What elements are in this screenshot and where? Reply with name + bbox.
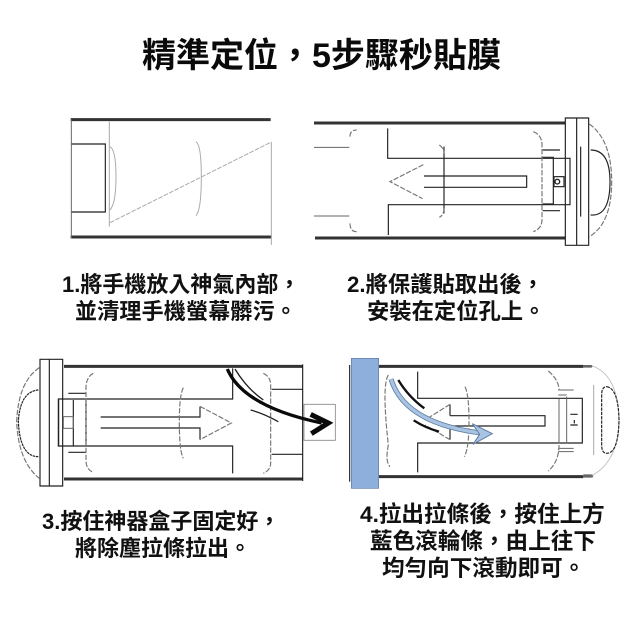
step 1 text: 1.將手機放入神氣內部， — [62, 272, 300, 297]
black motion strokes — [398, 380, 439, 432]
diagram: step 1 open device — [71, 119, 272, 245]
title: 精準定位，5步驟秒貼膜 — [142, 37, 501, 75]
step 4 text: 均勻向下滾動即可。 — [382, 556, 585, 581]
icon: blue roller arrow — [391, 379, 487, 434]
diagram: step 2 film on locator — [314, 118, 612, 245]
step 2 text: 安裝在定位孔上。 — [367, 299, 545, 324]
step 1 text: 並清理手機螢幕髒污。 — [75, 299, 297, 324]
step 4 text: 4.拉出拉條後，按住上方 — [360, 502, 605, 527]
step 3 text: 將除塵拉條拉出。 — [75, 536, 251, 561]
step 3 text: 3.按住神器盒子固定好， — [42, 509, 280, 534]
step 2 text: 2.將保護貼取出後， — [347, 272, 544, 297]
step 3 text — [42, 509, 280, 561]
blue roller bar — [351, 358, 379, 488]
step 1 text — [62, 272, 300, 324]
pull tab — [304, 404, 335, 440]
icon: black pull arrow — [227, 369, 322, 423]
step 2 text — [347, 272, 545, 324]
step 4 text: 藍色滾輪條，由上往下 — [370, 529, 596, 554]
diagram: step 3 hold and pull strip — [17, 359, 335, 486]
diagram: step 4 roll with blue roller — [350, 358, 619, 488]
step 4 text — [360, 502, 605, 581]
